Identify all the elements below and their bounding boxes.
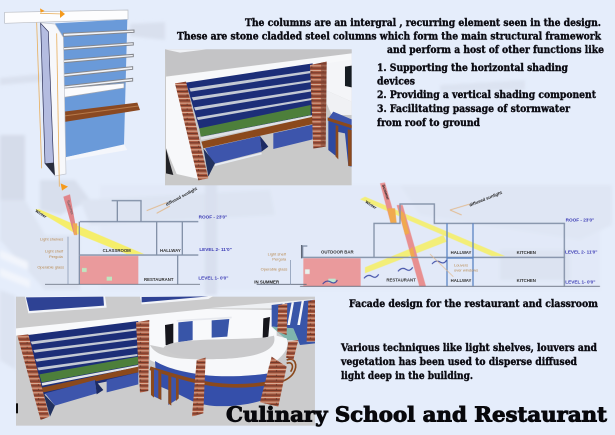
labels: diffused sunlight [468, 190, 503, 208]
labels: Light shelves [40, 237, 63, 242]
sill [65, 144, 127, 161]
render: louver facade close-up [165, 49, 352, 185]
left labels for second section: Operable glass [261, 267, 287, 272]
numbered list of column functions: 3. Facilitating passage of stormwater [377, 103, 570, 115]
techniques text block: vegetation has been used to disperse diffused [340, 356, 578, 368]
white fascia and walls [166, 53, 352, 180]
labels: LEVEL 2- 11'0" [565, 250, 597, 255]
upper windows [165, 324, 173, 347]
light shelf [64, 83, 124, 97]
numbered list of column functions: from roof to ground [377, 117, 481, 129]
techniques text block: light deep in the building. [341, 370, 473, 382]
air flow squiggles [323, 260, 447, 284]
terrace floor [163, 336, 274, 359]
left labels for second section: Light shelf [268, 251, 287, 256]
labels: HALLWAY [451, 250, 472, 255]
left labels for second section: IN SUMMER [254, 279, 280, 284]
orange arrows [40, 8, 68, 191]
render: full restaurant facade [16, 296, 315, 426]
winter sun beam [35, 209, 144, 254]
diffused sunlight arrows [147, 203, 170, 213]
techniques text block [340, 342, 598, 382]
louver shelves [63, 30, 134, 88]
sun beams [360, 197, 505, 256]
labels: diffused sunlight [165, 186, 198, 207]
labels: RESTAURANT [386, 278, 416, 283]
skylights [25, 296, 107, 313]
louver facade glazing [28, 321, 138, 395]
curved glazing [155, 361, 268, 406]
red summer zone [80, 256, 138, 284]
numbered list of column functions: devices [377, 76, 415, 88]
curved terrace parapet [150, 335, 287, 376]
roof beam [5, 10, 128, 23]
door frames [151, 367, 179, 406]
wooden beam [64, 103, 140, 122]
column and louver detail drawing [5, 8, 140, 191]
wooden beam [201, 117, 313, 148]
labels: CLASSROOM [103, 248, 131, 253]
labels [321, 184, 597, 285]
labels [34, 186, 232, 282]
labels: Light shelf [45, 249, 64, 254]
labels: OUTDOOR BAR [321, 249, 355, 254]
brick column shaded side [321, 62, 327, 147]
labels: KITCHEN [517, 250, 536, 255]
curved wooden rail [150, 368, 277, 386]
wooden beam [42, 367, 138, 392]
summer sun beam [63, 194, 77, 235]
vegetation [39, 357, 138, 382]
labels: HALLWAY [160, 248, 181, 253]
labels: LEVEL 1- 0'0" [565, 280, 595, 285]
labels: Operable glass [37, 264, 64, 269]
brick columns [17, 300, 315, 420]
numbered list of column functions [377, 62, 596, 129]
planter vegetation [199, 105, 311, 137]
labels: Winter [34, 208, 48, 219]
roof [165, 49, 352, 76]
labels: Pergola [49, 254, 64, 259]
louvers [189, 71, 312, 120]
orange guides [37, 13, 63, 187]
section diagram: outdoor bar, restaurant, kitchen [300, 183, 600, 286]
labels: KITCHEN [517, 278, 536, 283]
pergola arcs [278, 359, 296, 382]
roof edge and white upper wall [16, 309, 277, 348]
section diagram: classroom and restaurant [34, 186, 232, 284]
side column [41, 23, 66, 176]
labels: over windows [454, 268, 478, 273]
labels: Louvers [454, 262, 468, 267]
door panels [151, 368, 179, 405]
labels: LEVEL 1- 0'0" [198, 276, 228, 281]
description of columns [177, 17, 604, 56]
blue glazing [186, 63, 313, 137]
labels: Summer [66, 199, 75, 216]
far right glazing [272, 300, 315, 345]
title: Culinary School and Restaurant [226, 402, 608, 426]
red zone [303, 258, 361, 286]
labels: HALLWAY [451, 278, 472, 283]
left labels for second section [254, 245, 307, 284]
floors and walls [79, 201, 198, 284]
blue glazing panel [55, 19, 127, 157]
brick column left [175, 82, 208, 180]
lower blue panels [45, 380, 97, 406]
labels: Summer [381, 184, 391, 201]
brick column right [310, 62, 327, 149]
numbered list of column functions: 1. Supporting the horizontal shading [377, 62, 569, 74]
labels: LEVEL 2- 11'0" [199, 247, 232, 252]
labels: ROOF - 23'0" [199, 214, 227, 219]
diffused sunlight arrow [450, 204, 470, 215]
left labels for second section: Pergola [272, 256, 287, 261]
entry portal [328, 112, 352, 127]
lower blue panels [205, 136, 262, 164]
labels: Winter [364, 199, 378, 210]
column shadow face [41, 23, 54, 174]
labels: ROOF - 23'0" [566, 217, 594, 222]
floors and walls [302, 204, 565, 286]
labels: RESTAURANT [144, 277, 174, 282]
